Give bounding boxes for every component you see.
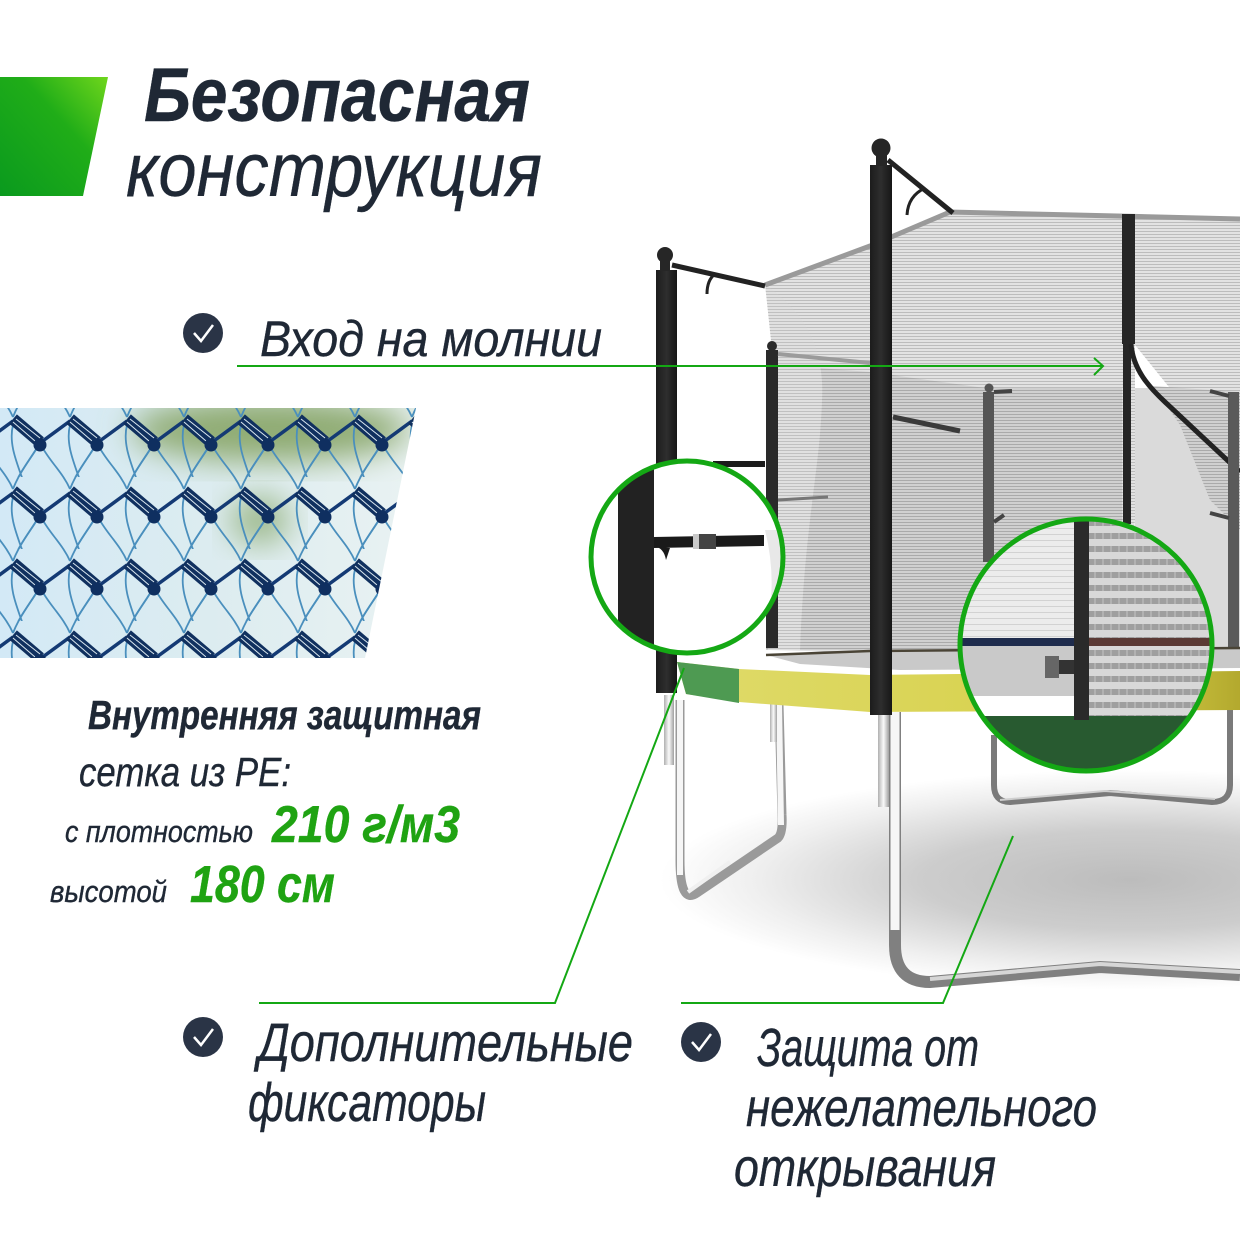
text block: net specification: 210 г/м3 [271,796,460,854]
label: opening protection [734,1018,1097,1198]
text block: net specification: с плотностью [65,814,253,849]
trampoline illustration [656,138,1240,982]
text block: net specification: 180 см [190,856,335,914]
floor shadow [620,770,1240,1000]
net lower back section [766,365,1122,650]
label: opening protection: открывания [734,1138,996,1198]
title: конструкция [126,128,542,213]
net top hem [765,212,1240,285]
icon: check 3 [681,1022,721,1062]
near poles [656,270,677,693]
net left front section [765,284,822,650]
text block: net specification: Внутренняя защитная [88,692,481,738]
label: extra fixators [248,1013,633,1133]
magnifier: net detail [958,518,1216,776]
text block: net specification: высотой [50,874,167,909]
label: opening protection: Защита от [757,1018,979,1078]
title: Безопасная [144,53,530,138]
icon: check 2 [183,1017,223,1057]
back left leg [680,700,782,896]
photo: net close-up [0,398,416,658]
front leg [895,712,1240,982]
zipper band [1122,214,1135,344]
icon: check 1 [183,313,223,353]
net upper [765,212,1240,660]
arrow: zipper pointer [237,358,1103,375]
label: extra fixators: фиксаторы [248,1073,486,1133]
rim [677,662,1240,712]
text block: net specification: сетка из PE: [79,749,291,795]
arrow: extra fixators pointer [259,668,684,1003]
title [126,53,542,213]
back right leg [994,710,1230,802]
green accent block [0,77,108,196]
zipper right area [1135,388,1240,650]
magnifier: strap fixator [591,460,790,660]
text block: net specification [50,692,481,914]
arrow: opening protection pointer [681,836,1013,1003]
label: extra fixators: Дополнительные [254,1013,633,1073]
mat [766,648,1240,670]
label: zipper entry: Вход на молнии [260,311,602,367]
far poles [983,392,994,562]
label: opening protection: нежелательного [746,1078,1097,1138]
